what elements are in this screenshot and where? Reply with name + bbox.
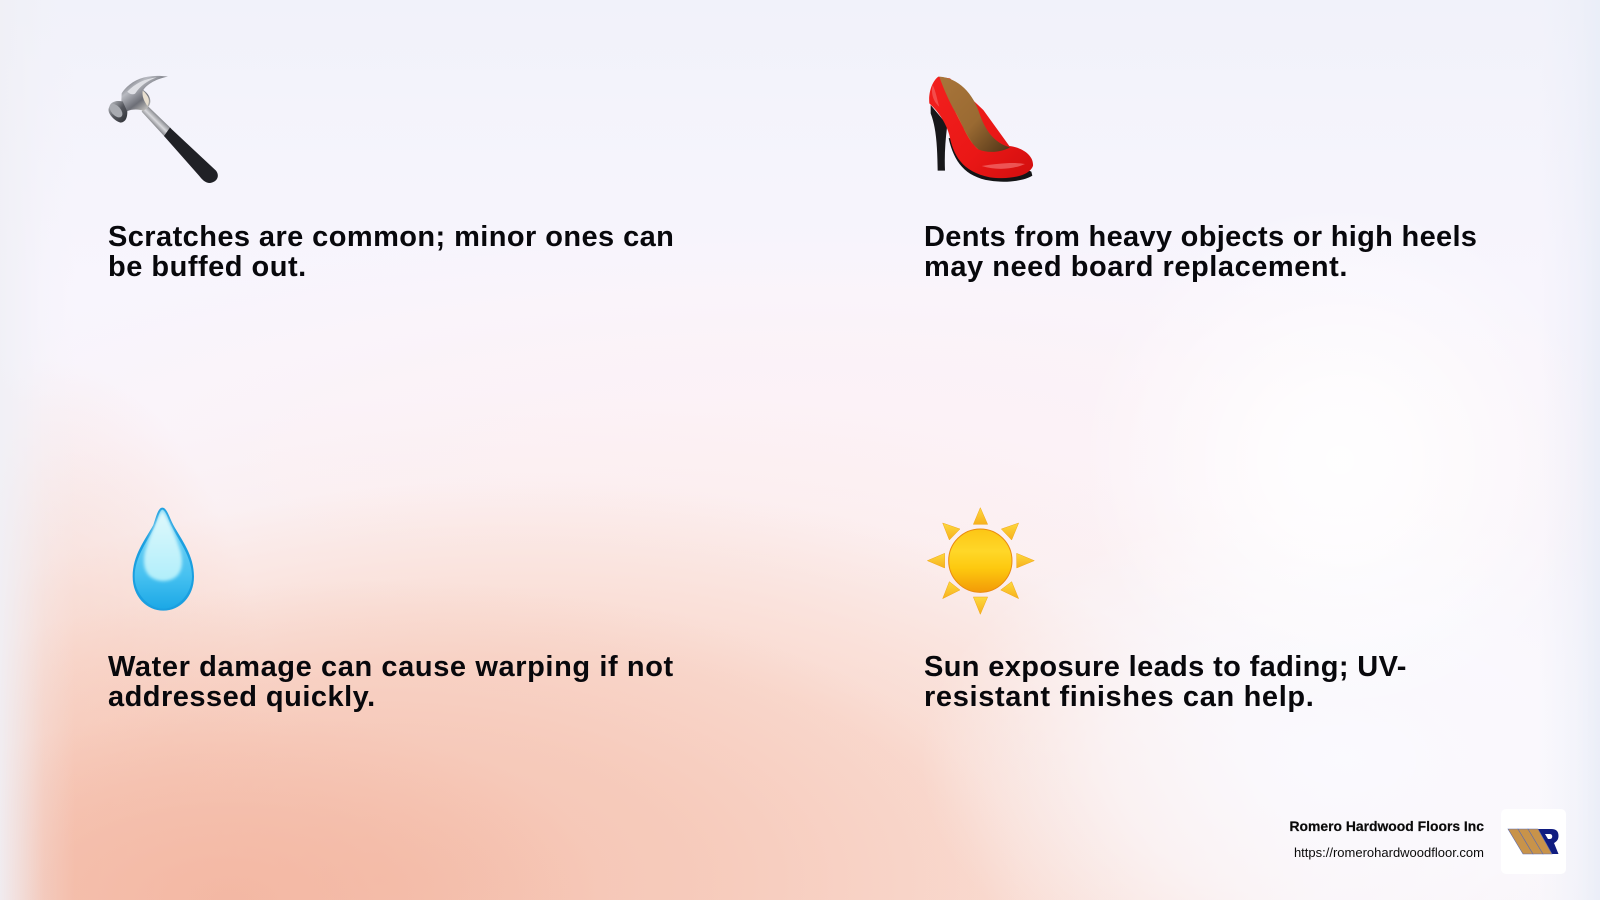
caption: water damage: addressed quickly.	[108, 681, 376, 713]
caption: scratches: Scratches are common; minor ones can	[108, 221, 674, 253]
caption: water damage	[108, 651, 674, 713]
logo card	[1501, 809, 1566, 874]
icon: hammer	[107, 76, 218, 183]
caption: sun exposure	[924, 651, 1407, 713]
brand url: https://romerohardwoodfloor.com	[1294, 845, 1484, 860]
caption: dents: Dents from heavy objects or high heels	[924, 221, 1477, 253]
brand name: Romero Hardwood Floors Inc	[1290, 818, 1484, 834]
caption: water damage: Water damage can cause warping if not	[108, 651, 674, 683]
icon: water drop	[133, 508, 194, 611]
caption: scratches	[108, 221, 674, 283]
icon: red high heel	[929, 77, 1033, 182]
caption: scratches: be buffed out.	[108, 251, 307, 283]
caption: sun exposure: resistant finishes can help.	[924, 681, 1314, 713]
caption: dents: may need board replacement.	[924, 251, 1348, 283]
icon: logo	[1508, 828, 1558, 854]
caption: sun exposure: Sun exposure leads to fading; UV-	[924, 651, 1407, 683]
caption: dents	[924, 221, 1477, 283]
icon: sun	[927, 508, 1034, 614]
